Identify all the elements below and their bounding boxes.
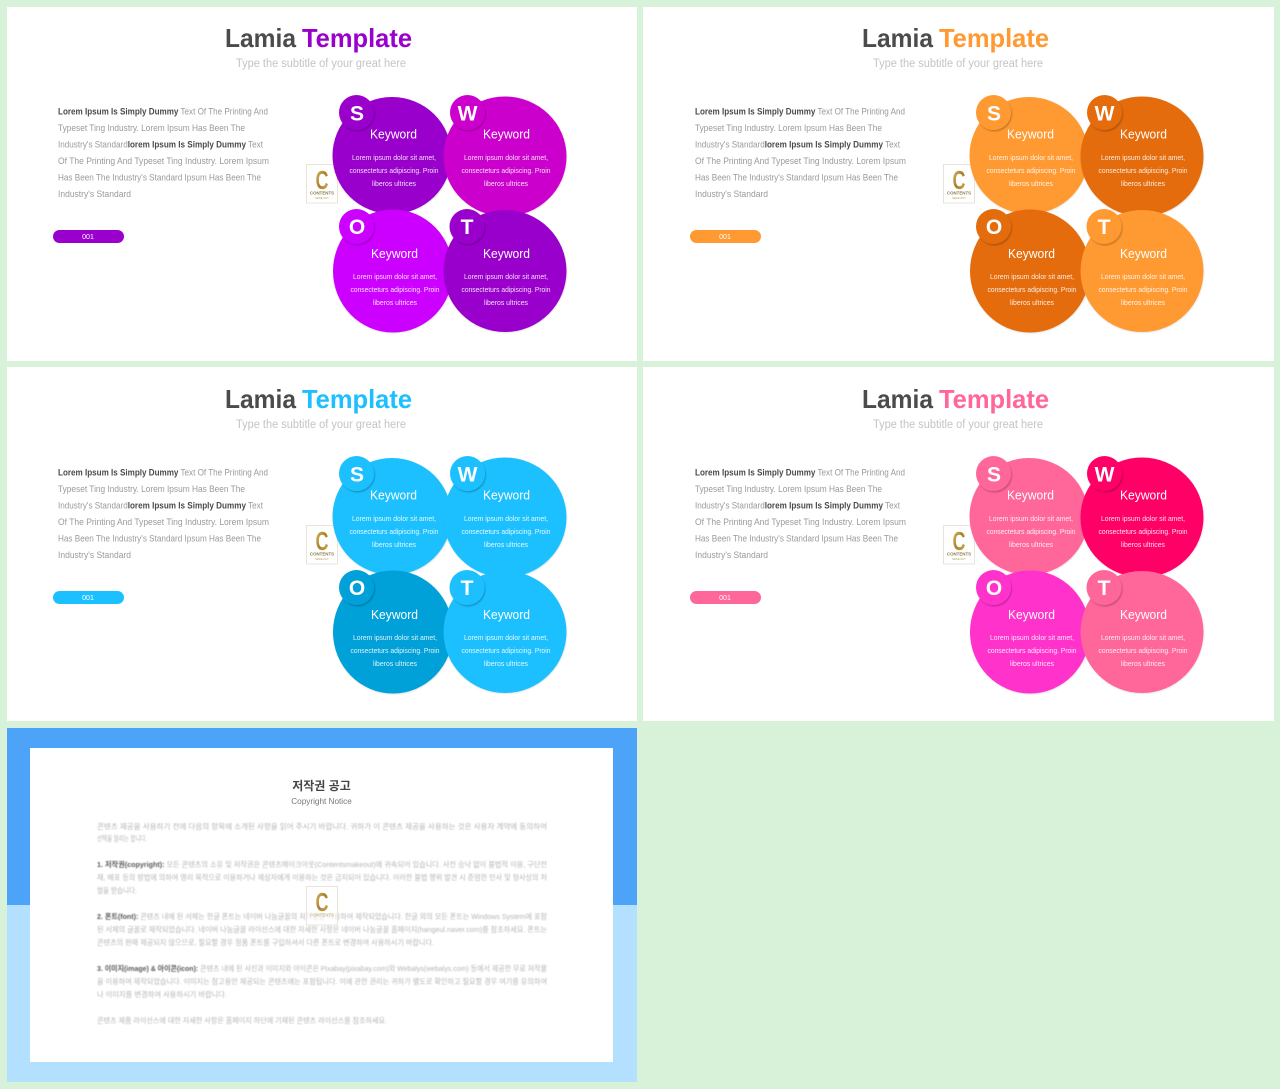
pill label [53,230,124,243]
text W: Keyword [1120,488,1167,502]
text block: Has Been The Industry's Standard Ipsum Has Been The [695,172,898,182]
badge W [1087,456,1122,491]
text block: Has Been The Industry's Standard Ipsum Has Been The [695,534,898,544]
text W: liberos ultrices [1121,540,1165,549]
badge S [339,456,374,491]
title [862,384,1049,414]
circle: weaknesses [1080,96,1204,216]
text T: Lorem ipsum dolor sit amet, [464,633,548,642]
text T: Lorem ipsum dolor sit amet, [1101,633,1185,642]
text block: Has Been The Industry's Standard Ipsum Has Been The [58,172,261,182]
text W: consecteturs adipiscing. Proin [462,166,550,175]
badge T: T [1098,216,1111,239]
text O: consecteturs adipiscing. Proin [988,285,1076,294]
copyright heading [291,778,352,806]
copyright heading: 저작권 공고 [292,778,351,793]
badge S [976,456,1011,491]
text S: Lorem ipsum dolor sit amet, [352,153,436,162]
pill label: 001 [82,234,94,241]
text O: liberos ultrices [373,298,417,307]
badge W: W [1095,464,1115,486]
badge T [450,209,484,244]
badge O: O [349,216,365,239]
badge T [450,570,484,605]
logo watermark: C [316,165,329,195]
panel: blue SWOT slide [7,367,637,721]
copyright body text: 콘텐츠 제품 라이선스에 대한 자세한 사항은 홈페이지 하단에 기재된 콘텐츠 라이선스를 참조하세요. [97,1016,387,1025]
text T: liberos ultrices [484,298,528,307]
text block: Typeset Ting Industry. Lorem Ipsum Has Been The [695,484,882,494]
circle: weaknesses [444,96,566,216]
logo watermark: C [952,526,966,556]
badge S: S [350,464,364,486]
logo watermark: CONTENTS [947,552,971,556]
text W: liberos ultrices [1121,179,1165,188]
SWOT circles [332,456,566,694]
text O: Lorem ipsum dolor sit amet, [353,272,437,281]
text T: consecteturs adipiscing. Proin [1098,285,1188,294]
text T [1098,607,1188,668]
text W [1098,126,1188,188]
copyright body text: 2. 폰트(font): 콘텐츠 내에 된 서체는 한글 폰트는 네이버 나눔글꼴의 저작물을 사용하여 제작되었습니다. 한글 외의 모든 폰트는 Windows System에 포함 [97,912,547,921]
text block: Industry's Standardlorem Ipsum Is Simply Dummy Text [695,500,901,510]
text block [58,468,269,560]
copyright body text: 벌을 받습니다. [97,886,137,895]
text block: Typeset Ting Industry. Lorem Ipsum Has Been The [58,123,245,133]
text O: Keyword [1008,246,1055,261]
logo watermark: C [952,165,966,195]
pill label [690,591,761,604]
circle: threats [1080,571,1204,693]
copyright body text: 선택을 알리는 합니다. [97,834,147,843]
SWOT circles [332,95,566,332]
text T: Lorem ipsum dolor sit amet, [464,272,548,281]
text T: liberos ultrices [1121,298,1165,307]
text S: consecteturs adipiscing. Proin [986,166,1076,175]
text W [462,488,550,549]
text block: Industry's Standard [58,189,131,199]
text block: Industry's Standard [58,550,131,560]
logo watermark: CONTENTS [310,552,334,556]
logo watermark: CONTENTS [310,912,334,918]
badge S [339,95,374,130]
text S: consecteturs adipiscing. Proin [350,527,438,536]
badge O [976,209,1011,244]
badge W [450,456,485,491]
logo watermark [306,886,338,925]
text S: Keyword [1007,488,1054,502]
circle: strengths [970,458,1088,575]
text O: Keyword [371,246,418,261]
circle: threats [444,571,566,693]
copyright body text: 을 이용하여 제작되었습니다. 이미지는 참고용만 제공되는 콘텐츠에는 포함됩니다. 이에 관한 권리는 귀하가 별도로 확인하고 필요할 경우 여기를 유의하여 [97,977,547,986]
text S: Keyword [1007,126,1054,142]
text T [1098,246,1188,307]
copyright body text: 3. 이미지(image) & 아이콘(icon): 콘텐츠 내에 된 사진과 이미지와 아이콘은 Pixabay(pixabay.com)와 Webalys(webalys.com) 등에서 제공한 무료 저작물 [97,964,547,973]
text S: consecteturs adipiscing. Proin [350,166,438,175]
text block: Industry's Standard [695,550,768,560]
logo watermark: CONTENTS [310,190,334,196]
text W: Keyword [483,488,530,502]
circle: weaknesses [1080,458,1204,578]
panel: copyright notice slide [7,728,637,1082]
text S: Keyword [370,126,417,142]
badge O: O [349,577,365,600]
badge S: S [350,102,364,126]
logo watermark [944,526,974,564]
badge O: O [986,216,1002,239]
SWOT circles [970,95,1204,332]
text S: liberos ultrices [372,179,416,188]
circle: opportunities [970,210,1090,332]
title: Lamia [862,23,933,53]
text O: Lorem ipsum dolor sit amet, [353,633,437,642]
copyright body text: 1. 저작권(copyright): 모든 콘텐츠의 소유 및 저작권은 콘텐츠메이크아웃(Contentsmakeout)에 귀속되어 있습니다. 사전 승낙 없이 불법적 이용, 구단전 [97,860,547,869]
title: Template [939,384,1049,414]
text block: Has Been The Industry's Standard Ipsum Has Been The [58,534,261,544]
badge T: T [461,577,474,600]
pill label: 001 [82,595,94,602]
text S: consecteturs adipiscing. Proin [986,527,1076,536]
text block: Typeset Ting Industry. Lorem Ipsum Has Been The [695,123,882,133]
badge O [339,209,374,244]
text W [462,126,550,188]
pill label: 001 [719,595,731,602]
text T [462,607,550,668]
title: Template [302,23,412,53]
text O [350,607,440,668]
text block [695,106,906,199]
title: Lamia [225,384,296,414]
circle: strengths [332,97,452,214]
text O [988,607,1076,668]
text S: liberos ultrices [1009,540,1053,549]
title [225,384,412,414]
text O: Keyword [371,607,418,622]
text block: Industry's Standardlorem Ipsum Is Simply Dummy Text [695,140,901,150]
circle: opportunities [333,570,453,694]
badge S: S [987,102,1001,126]
badge W [450,95,485,130]
panel: orange SWOT slide [643,7,1274,361]
text O: liberos ultrices [1010,659,1054,668]
text W: consecteturs adipiscing. Proin [1098,527,1188,536]
text W: liberos ultrices [484,179,528,188]
text block: Of The Printing And Typeset Ting Industry. Lorem Ipsum [695,517,906,527]
badge O [976,570,1011,605]
text W [1098,488,1188,549]
logo watermark: MAKE OUT [952,557,966,561]
badge W: W [1095,102,1115,126]
circle: threats [444,210,566,332]
text S: Lorem ipsum dolor sit amet, [352,514,436,523]
copyright body text: 콘텐츠 제공을 사용하기 전에 다음의 항목에 소개된 사항을 읽어 주시기 바랍니다. 귀하가 이 콘텐츠 제공을 사용하는 것은 사용자 계약에 동의하여 [97,822,547,831]
logo watermark: CONTENTS [947,190,971,196]
text S: Keyword [370,488,417,502]
text block: Lorem Ipsum Is Simply Dummy Text Of The Printing And [58,106,268,116]
text block: Lorem Ipsum Is Simply Dummy Text Of The Printing And [695,468,905,478]
badge S [976,95,1011,130]
logo watermark: MAKE OUT [315,196,329,200]
badge T: T [461,216,474,239]
logo watermark [306,526,338,564]
text T: consecteturs adipiscing. Proin [462,646,550,655]
text W: Lorem ipsum dolor sit amet, [1101,153,1185,162]
text block: Industry's Standard [695,189,768,199]
text S: Lorem ipsum dolor sit amet, [989,153,1073,162]
badge T [1086,209,1122,244]
pill label: 001 [719,234,731,241]
text O: consecteturs adipiscing. Proin [350,646,440,655]
text T: liberos ultrices [1121,659,1165,668]
subtitle: Type the subtitle of your great here [873,419,1043,431]
text W: Lorem ipsum dolor sit amet, [464,153,548,162]
title: Template [939,23,1049,53]
SWOT circles [970,456,1204,694]
text O: consecteturs adipiscing. Proin [988,646,1076,655]
text W: Lorem ipsum dolor sit amet, [1101,514,1185,523]
title: Template [302,384,412,414]
logo watermark: MAKE OUT [315,557,329,561]
panel: purple SWOT slide [7,7,637,361]
logo watermark: MAKE OUT [952,196,966,200]
text T [462,246,550,307]
circle: threats [1080,210,1204,332]
text block: Industry's Standardlorem Ipsum Is Simply Dummy Text [58,500,264,510]
copyright body text: 재, 배포 등의 방법에 의하여 영리 목적으로 이용하거나 제삼자에게 이용하는 것은 금지되어 있습니다. 이러한 불법 행위 발견 시 준엄한 민사 및 형사상의 처 [97,873,547,882]
badge O [339,570,374,605]
circle: strengths [332,458,452,575]
circle: opportunities [333,210,453,332]
text O [350,246,440,307]
copyright heading: Copyright Notice [291,797,352,806]
text T: Keyword [483,246,530,261]
text O: Keyword [1008,607,1055,622]
text T: Keyword [1120,607,1167,622]
text S [350,126,438,188]
text S [986,488,1076,549]
text S [986,126,1076,188]
text block: Industry's Standardlorem Ipsum Is Simply Dummy Text [58,140,264,150]
copyright body text: 된 서체의 글꼴로 제작되었습니다. 네이버 나눔글꼴 라이선스에 대한 자세한 사항은 네이버 나눔글꼴 홈페이지(hangeul.naver.com)를 참조하세요. 폰트는 [97,925,547,934]
title: Lamia [225,23,296,53]
subtitle: Type the subtitle of your great here [236,419,406,431]
text O: liberos ultrices [373,659,417,668]
copyright body text: 나 이미지를 변경하여 사용하시기 바랍니다. [97,990,227,999]
title [225,23,412,53]
badge W [1087,95,1122,130]
circle: opportunities [970,570,1090,694]
pill label [53,591,124,604]
text O: liberos ultrices [1010,298,1054,307]
text O [988,246,1076,307]
text block: Lorem Ipsum Is Simply Dummy Text Of The Printing And [695,106,905,116]
text O: consecteturs adipiscing. Proin [350,285,440,294]
badge T [1086,570,1122,605]
text block [58,106,269,199]
text block: Typeset Ting Industry. Lorem Ipsum Has Been The [58,484,245,494]
text T: consecteturs adipiscing. Proin [1098,646,1188,655]
logo watermark [306,164,338,203]
text block: Of The Printing And Typeset Ting Industry. Lorem Ipsum [695,156,906,166]
logo watermark [944,164,974,203]
text T: consecteturs adipiscing. Proin [462,285,550,294]
text S: Lorem ipsum dolor sit amet, [989,514,1073,523]
text block: Of The Printing And Typeset Ting Industry. Lorem Ipsum [58,517,269,527]
logo watermark: C [316,887,329,917]
text W: consecteturs adipiscing. Proin [462,527,550,536]
text W: Keyword [1120,126,1167,142]
text block: Of The Printing And Typeset Ting Industry. Lorem Ipsum [58,156,269,166]
text T: Keyword [483,607,530,622]
copyright body text [97,822,547,1025]
text T: Keyword [1120,246,1167,261]
text O: Lorem ipsum dolor sit amet, [990,633,1074,642]
badge S: S [987,464,1001,486]
circle: strengths [970,97,1088,214]
logo watermark: C [316,526,329,556]
title [862,23,1049,53]
text W: consecteturs adipiscing. Proin [1098,166,1188,175]
badge T: T [1098,577,1111,600]
text W: Lorem ipsum dolor sit amet, [464,514,548,523]
pill label [690,230,761,243]
text S: liberos ultrices [1009,179,1053,188]
text S [350,488,438,549]
copyright body text: 콘텐츠의 판매 제공되지 않으므로, 필요할 경우 정품 폰트를 구입하셔서 다른 폰트로 변경하여 사용하시기 바랍니다. [97,938,434,947]
badge O: O [986,577,1002,600]
text T: Lorem ipsum dolor sit amet, [1101,272,1185,281]
badge W: W [458,102,478,126]
text S: liberos ultrices [372,540,416,549]
subtitle: Type the subtitle of your great here [873,58,1043,70]
text block [695,468,906,560]
subtitle: Type the subtitle of your great here [236,58,406,70]
text block: Lorem Ipsum Is Simply Dummy Text Of The Printing And [58,468,268,478]
badge W: W [458,464,478,486]
text O: Lorem ipsum dolor sit amet, [990,272,1074,281]
panel: pink SWOT slide [643,367,1274,721]
text W: liberos ultrices [484,540,528,549]
title: Lamia [862,384,933,414]
text T: liberos ultrices [484,659,528,668]
circle: weaknesses [444,458,566,578]
text W: Keyword [483,126,530,142]
